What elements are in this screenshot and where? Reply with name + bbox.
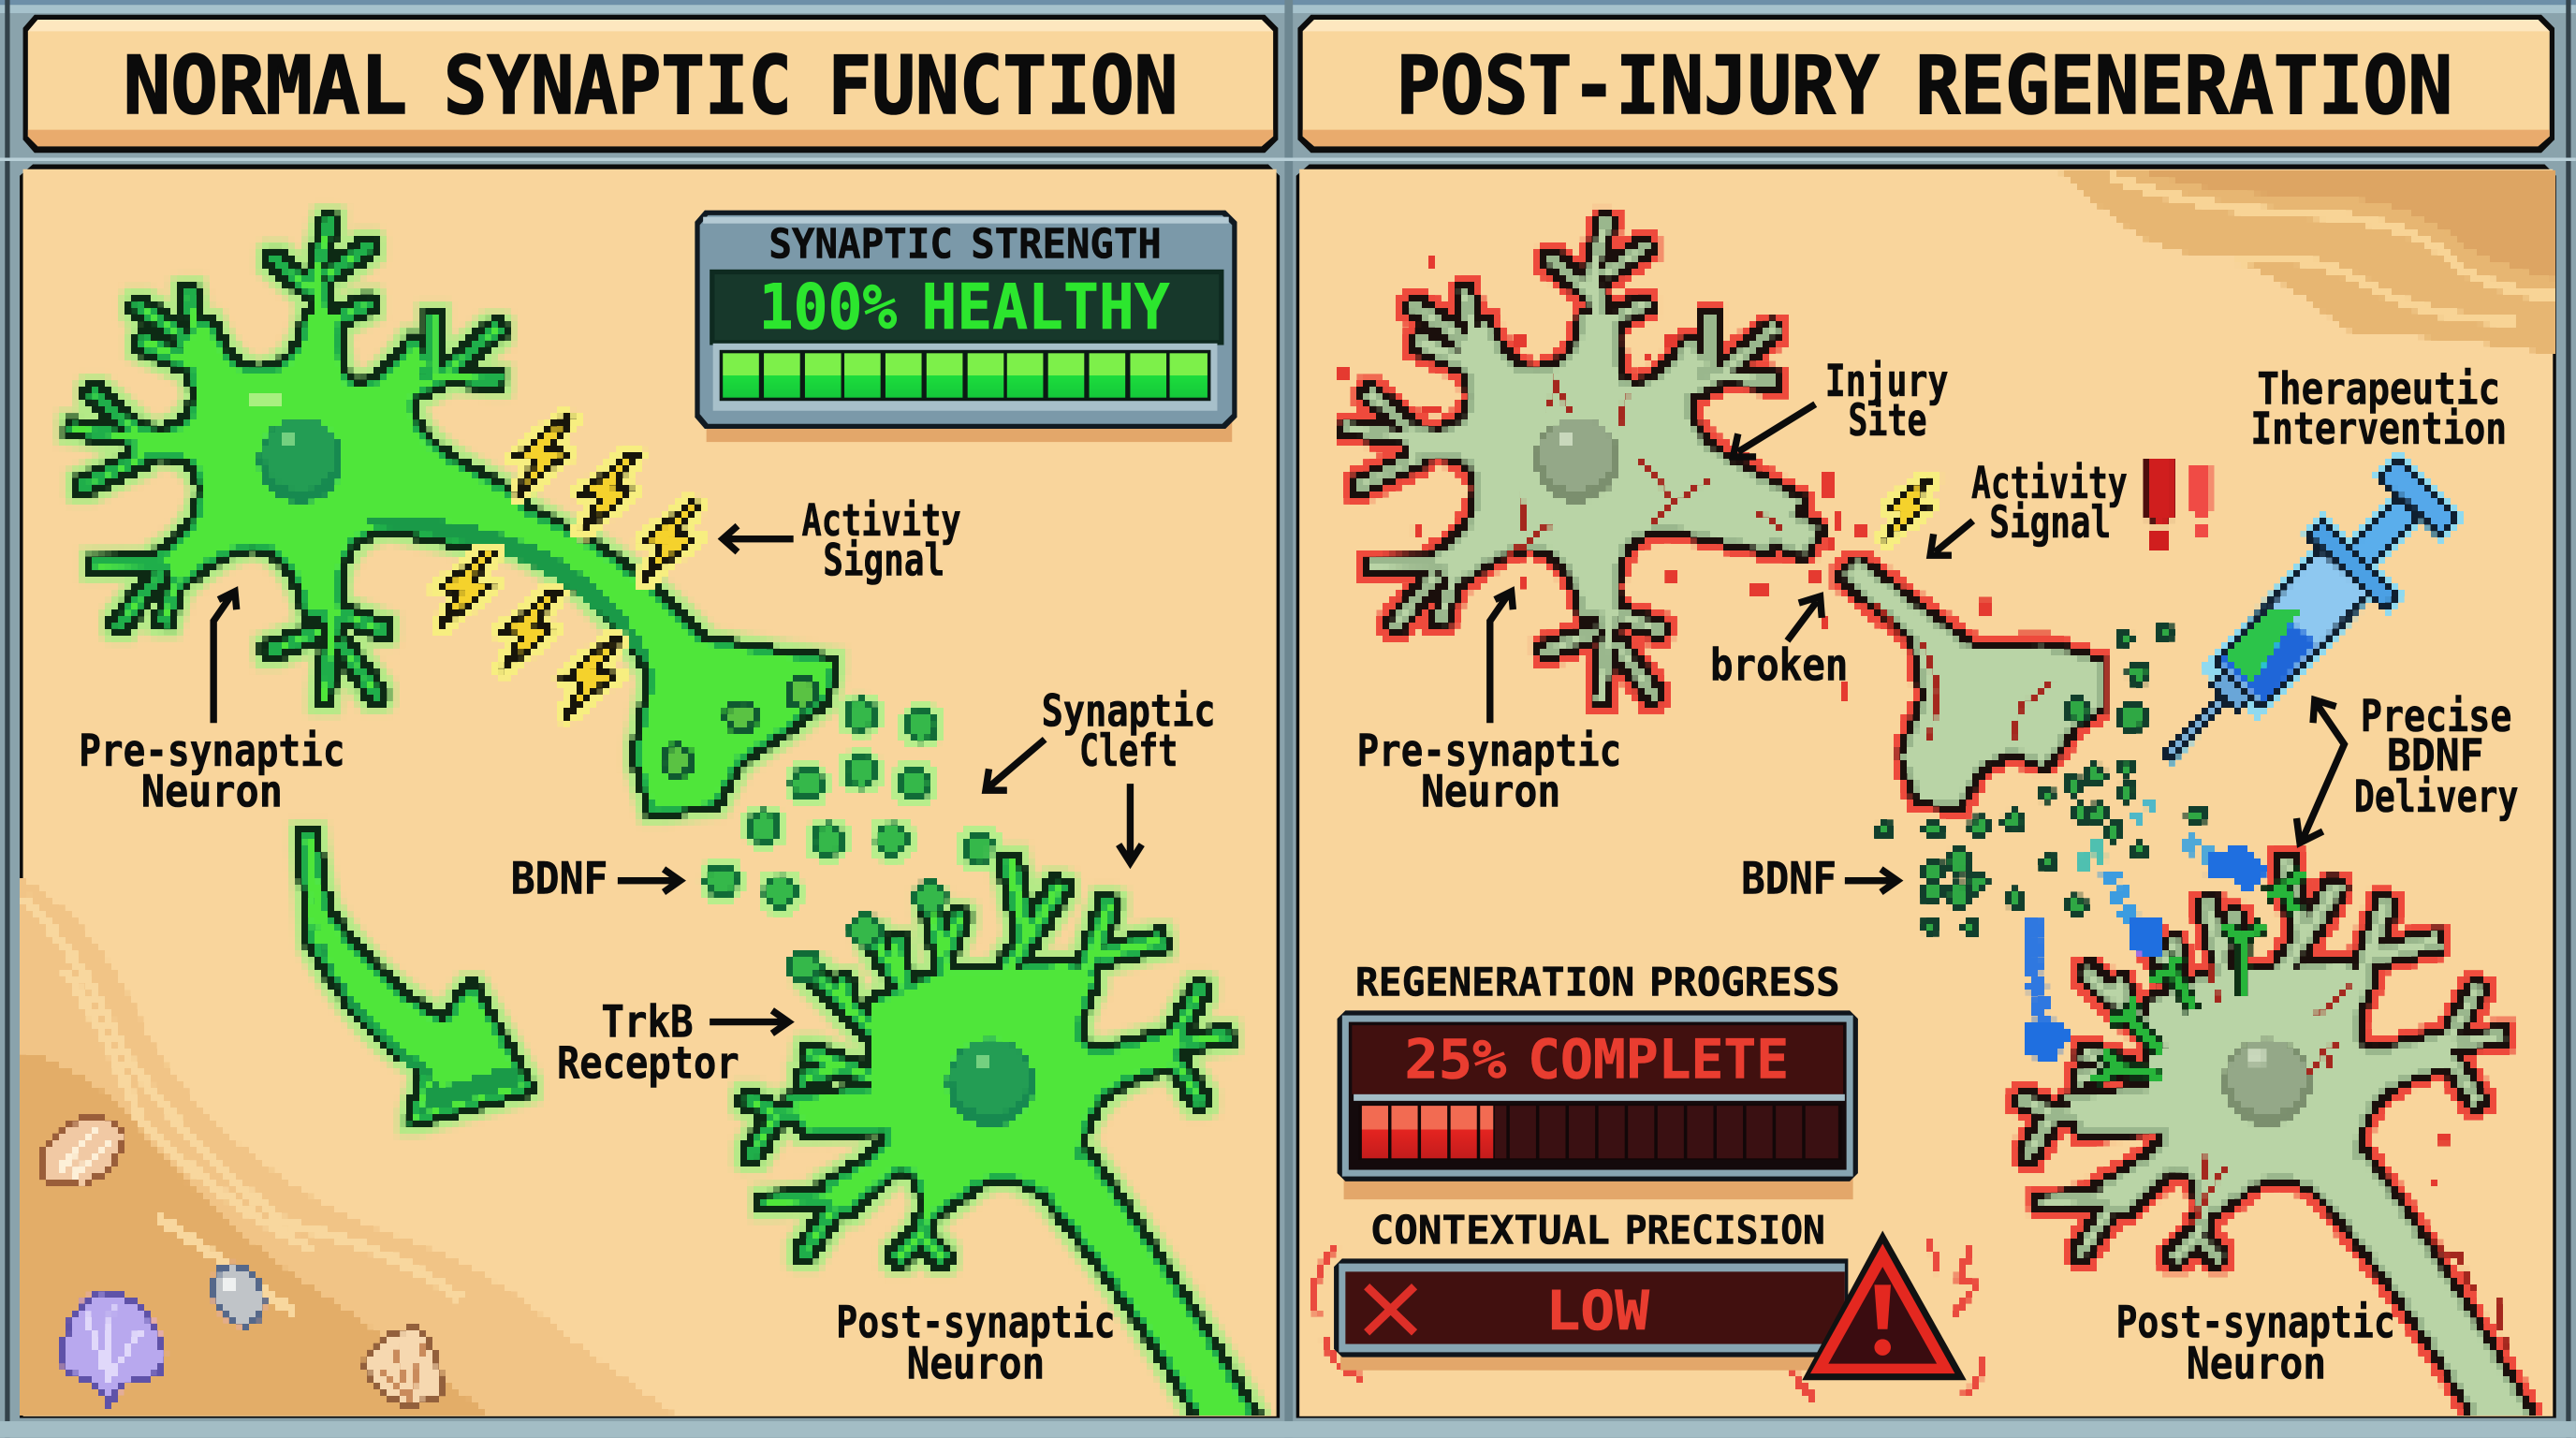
label: post-synaptic neuron: Neuron (907, 1338, 1045, 1389)
sand patch: lower left (22, 879, 677, 1416)
label: TrkB receptor (557, 996, 739, 1089)
shell: purple (63, 1291, 165, 1403)
panel fill: right (1299, 169, 2553, 1416)
axon shading (365, 518, 651, 666)
left panel artwork (22, 218, 1258, 1423)
label: synaptic cleft: Cleft (1079, 726, 1178, 777)
arrow: pre-synaptic left (213, 592, 237, 723)
label: activity signal: Activity (1971, 458, 2128, 509)
nucleus: pre-synaptic (258, 418, 344, 503)
readout: low: LOW (1545, 1279, 1649, 1343)
vesicles in bouton (662, 679, 816, 775)
arrow: pre-synaptic right (1490, 592, 1513, 723)
title: normal synaptic function: SYNAPTIC (444, 39, 792, 133)
readout: 100% healthy (710, 270, 1223, 345)
icon: lightning bolts (433, 410, 700, 725)
shell: cream (365, 1328, 441, 1406)
nucleus: damaged post-synaptic (2223, 1038, 2311, 1127)
label: post-synaptic neuron (2115, 1298, 2395, 1389)
label: pre-synaptic neuron (79, 726, 345, 818)
BDNF particles: scattered (1878, 626, 2204, 933)
label: post-synaptic neuron: Post-synaptic (836, 1298, 1116, 1349)
alert squiggles: red (1315, 1240, 1983, 1400)
title: post-injury regeneration (1397, 39, 2452, 133)
arrow: BDNF right (1845, 869, 1897, 892)
nucleus: post-synaptic (946, 1038, 1035, 1127)
TrkB receptors: activated green (2095, 871, 2304, 1081)
label: therapeutic intervention (2250, 364, 2507, 455)
readout: 100% healthy: HEALTHY (922, 271, 1170, 344)
arrow: activity signal right (1930, 521, 1973, 555)
shell: peach (42, 1119, 124, 1186)
label: pre-synaptic neuron: Neuron (1421, 767, 1560, 818)
label: activity signal (801, 495, 961, 586)
label: activity signal: Signal (823, 535, 944, 586)
label: pre-synaptic neuron: Pre-synaptic (1357, 726, 1621, 777)
title: normal synaptic function: NORMAL (124, 39, 407, 133)
bound BDNF on TrkB receptors (790, 882, 944, 981)
arrow: activity signal (723, 526, 794, 552)
arrow: broken (1787, 596, 1822, 640)
neuron: post-synaptic healthy (744, 858, 1258, 1423)
meter label: STRENGTH (971, 221, 1162, 269)
icon: curved direction arrow (300, 833, 531, 1123)
arrow: injury site (1734, 404, 1815, 457)
label: pre-synaptic neuron: Neuron (141, 767, 283, 818)
injury debris: red splatter (1339, 255, 2448, 1186)
nucleus: damaged pre-synaptic (1534, 418, 1619, 503)
progress bar: 25% (1354, 1094, 1845, 1160)
arrow: BDNF left (618, 869, 681, 892)
arrow: synaptic cleft down (1119, 784, 1142, 862)
label: precise BDNF delivery: Precise (2361, 691, 2511, 742)
readout: 25% complete: 25% (1405, 1027, 1506, 1091)
meter label (1370, 1208, 1825, 1254)
neuron: pre-synaptic damaged (1345, 218, 1821, 703)
readout: 100% healthy: 100% (759, 271, 897, 344)
label: activity signal (1971, 458, 2128, 549)
icon: syringe (2123, 442, 2475, 800)
label: pre-synaptic neuron (1357, 726, 1621, 818)
title: post-injury regeneration: POST-INJURY (1397, 39, 1880, 133)
meter label: PROGRESS (1649, 960, 1840, 1005)
label: post-synaptic neuron: Post-synaptic (2115, 1298, 2395, 1349)
icon: x mark (1367, 1286, 1414, 1332)
label: injury site: Site (1848, 395, 1927, 447)
label: injury site (1825, 356, 1948, 447)
label: activity signal: Signal (1989, 497, 2111, 549)
label: precise BDNF delivery: Delivery (2354, 771, 2518, 823)
arrow: TrkB (710, 1010, 788, 1034)
panel: left background (20, 165, 1280, 1418)
label: post-synaptic neuron: Neuron (2187, 1338, 2326, 1389)
label: pre-synaptic neuron: Pre-synaptic (79, 726, 345, 777)
label: synaptic cleft: Synaptic (1042, 686, 1216, 738)
title: normal synaptic function: FUNCTION (828, 39, 1178, 133)
panel: regeneration progress meter (1338, 960, 1858, 1199)
delivery blobs: blue (2027, 843, 2267, 1064)
arrow: synaptic cleft diagonal (986, 740, 1045, 790)
panel fill: left (23, 169, 1277, 1416)
label: precise BDNF delivery (2354, 691, 2518, 823)
axon fragment with bouton (1841, 560, 2101, 807)
meter label: PRECISION (1625, 1208, 1825, 1254)
label: injury site: Injury (1825, 356, 1948, 407)
label: BDNF: BDNF (511, 854, 607, 905)
panel: synaptic strength meter (695, 211, 1237, 442)
icon: small lightning bolt (1880, 469, 1935, 550)
progress bar: full (713, 344, 1217, 411)
label: therapeutic intervention: Intervention (2250, 404, 2507, 455)
label: therapeutic intervention: Therapeutic (2257, 364, 2500, 416)
header: right title banner (1297, 15, 2554, 153)
neuron: post-synaptic damaged (2021, 858, 2535, 1423)
header: left title banner (23, 15, 1278, 153)
label: activity signal: Activity (801, 495, 961, 547)
label: TrkB receptor: Receptor (557, 1037, 739, 1089)
cracks: post-synaptic (2136, 961, 2505, 1347)
readout: 25% complete: COMPLETE (1528, 1027, 1789, 1091)
title: normal synaptic function (124, 39, 1178, 133)
arrow: precise delivery double headed (2296, 700, 2344, 843)
icon: warning triangle (1802, 1230, 1967, 1380)
label: precise BDNF delivery: BDNF (2387, 730, 2484, 782)
panel: right background (1296, 165, 2556, 1418)
label: BDNF: BDNF (1741, 854, 1837, 905)
labels: left panel (79, 495, 1216, 1389)
highlight: soma (252, 394, 285, 405)
label: post-synaptic neuron (836, 1298, 1116, 1389)
icon: red exclamation marks (2147, 460, 2211, 550)
title: post-injury regeneration: REGENERATION (1915, 39, 2452, 133)
sand patch: upper right (2056, 169, 2556, 355)
cracks: pre-synaptic (1503, 374, 2054, 740)
panel: contextual precision meter (1334, 1208, 1967, 1380)
label: broken: broken (1710, 640, 1848, 692)
right panel artwork (1315, 169, 2556, 1423)
neuron: pre-synaptic healthy (69, 218, 835, 814)
BDNF molecules (707, 700, 994, 907)
meter label (1355, 960, 1840, 1005)
label: TrkB receptor: TrkB (601, 996, 694, 1048)
meter label: SYNAPTIC (768, 221, 953, 269)
meter label: REGENERATION (1355, 960, 1634, 1005)
readout: 25% complete (1405, 1027, 1789, 1091)
meter label (768, 221, 1162, 269)
label: synaptic cleft (1042, 686, 1216, 777)
meter label: CONTEXTUAL (1370, 1208, 1610, 1254)
labels: right panel (1357, 356, 2518, 1389)
delivery streams: blue (2034, 801, 2237, 1027)
stone: gray (210, 1258, 269, 1330)
